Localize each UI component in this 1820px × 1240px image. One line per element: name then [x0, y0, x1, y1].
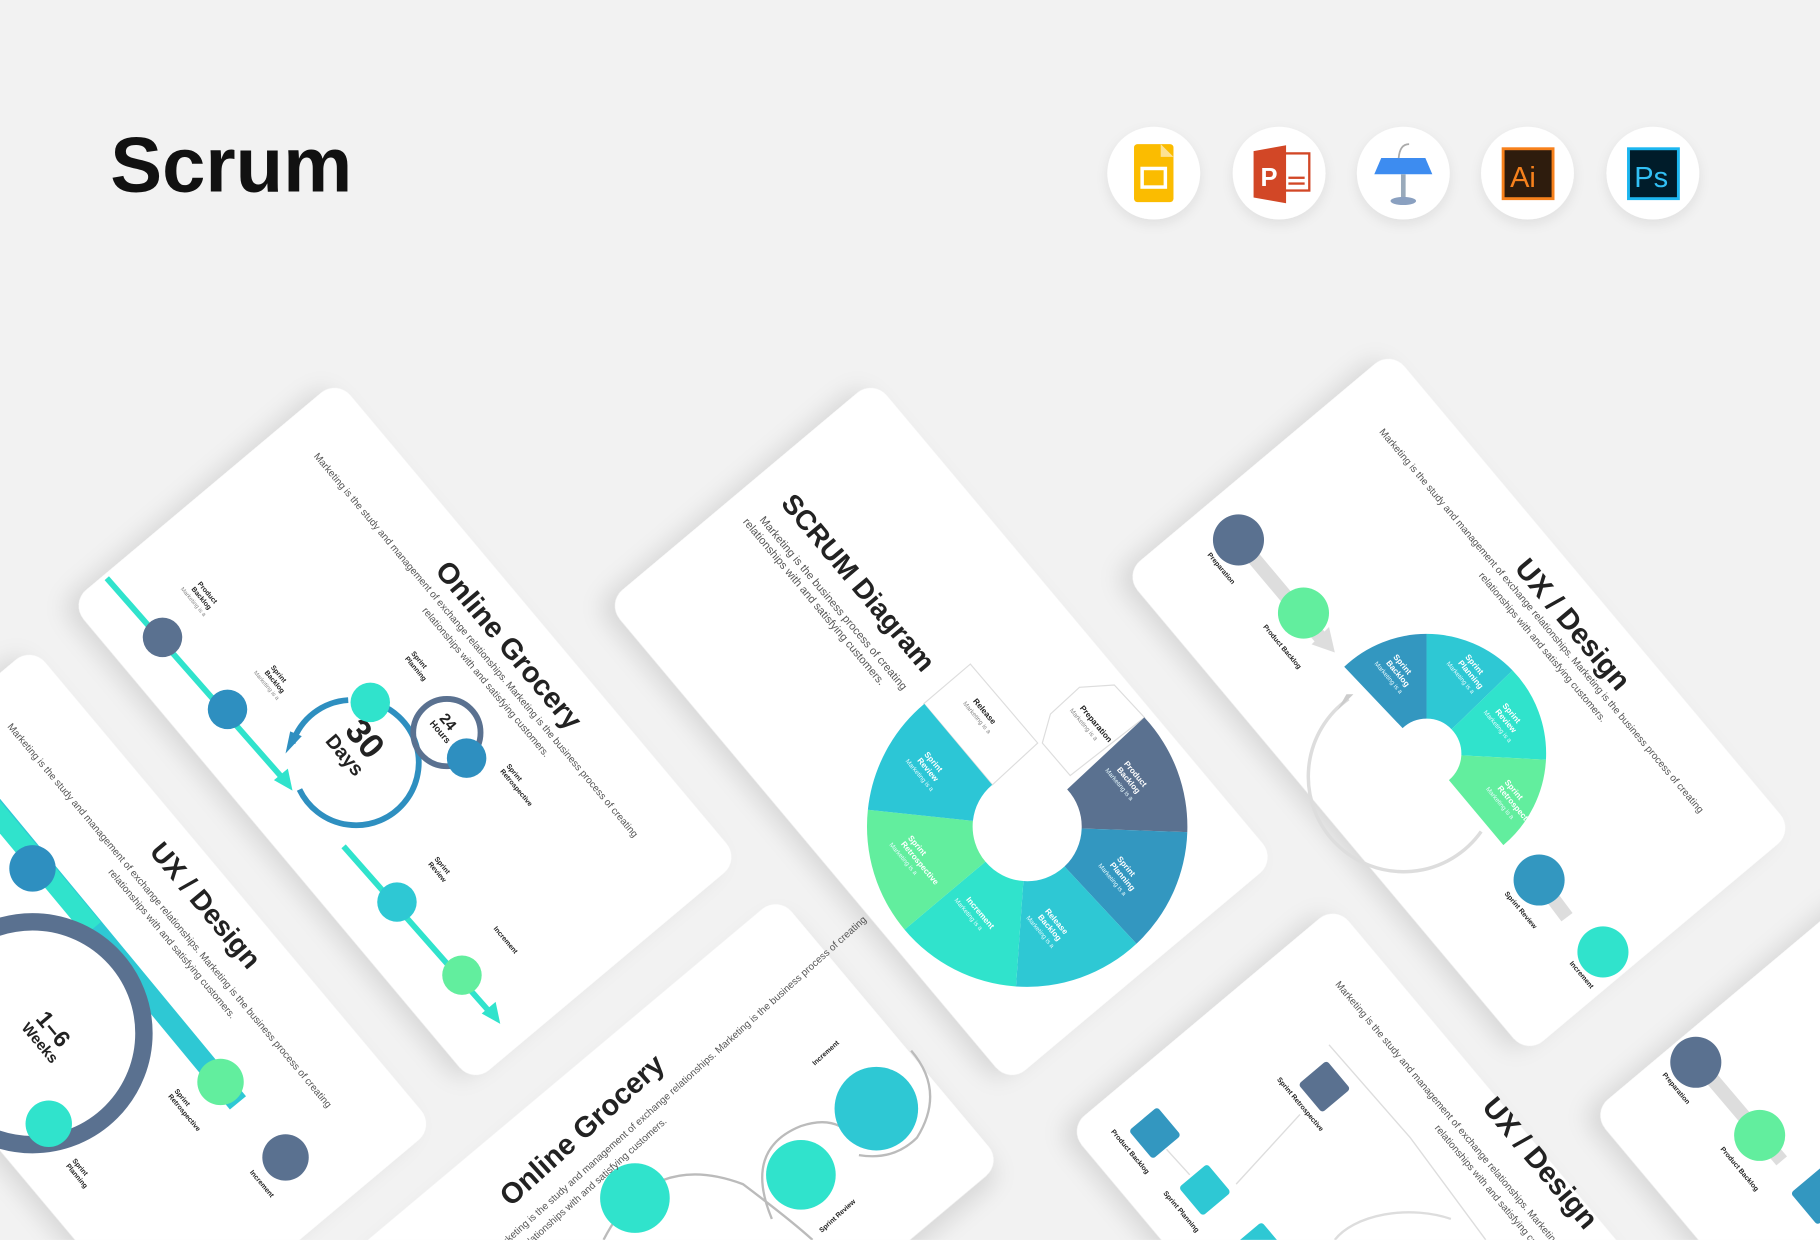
description: relationships with and satisfying customers. [1476, 571, 1608, 725]
half donut: Marketing is a [1373, 661, 1404, 696]
half donut: Sprint [1391, 653, 1413, 677]
labels: Marketing is a [179, 587, 207, 619]
title: Scrum [110, 123, 352, 209]
cycle arc [1308, 699, 1481, 872]
description: Marketing is the study and management of exchange relationships. Marketing is the business process of creating [311, 451, 640, 840]
panel: online grocery top-left: Sprint [269, 664, 288, 685]
description: Marketing is the business process of creating [757, 514, 909, 693]
description: relationships with and satisfying customers. [106, 867, 237, 1021]
icon: google slides [1107, 127, 1200, 220]
donut chart: Marketing is a [887, 842, 919, 877]
donut chart: Sprint [906, 834, 928, 858]
half donut: Marketing is a [1482, 709, 1513, 745]
icon: illustrator: Ai [1510, 162, 1536, 194]
donut chart: Marketing is a [904, 758, 935, 793]
panel: UX design left: Sprint [70, 1158, 89, 1178]
panel: UX design bottom-right: Sprint Planning [1162, 1190, 1200, 1234]
half donut: Retrospective [1496, 784, 1537, 831]
panel: UX design top-right [1124, 350, 1794, 1054]
donut chart: Planning [1108, 861, 1137, 893]
panel: UX design left: Increment [248, 1169, 275, 1200]
panel: online grocery top-left: Sprint [433, 856, 451, 876]
donut chart: Retrospective [899, 840, 941, 887]
panel: online grocery bottom [368, 904, 998, 1240]
panel: online grocery bottom: Sprint Review [818, 1198, 858, 1234]
donut chart: Sprint [922, 750, 945, 774]
labels: Retrospective [166, 1093, 201, 1133]
diamond nodes [1298, 1060, 1351, 1113]
nodes [835, 1067, 918, 1150]
panel: UX design top-right: Sprint Review [1503, 891, 1538, 931]
panel: online grocery top-left: Retrospective [498, 768, 533, 808]
title: Online Grocery [429, 555, 588, 736]
donut chart: Product [1122, 759, 1149, 789]
icon: keynote [1357, 127, 1450, 220]
title: UX / Design [144, 836, 267, 975]
description: Marketing is the study and management of exchange relationships. Marketing is the business process of creating [5, 722, 333, 1110]
panel: UX design bottom-right: Product Backlog [1109, 1129, 1150, 1175]
labels: Sprint [173, 1088, 191, 1108]
panel: online grocery top-left: Days [321, 730, 368, 781]
tab: preparation: Preparation [1078, 704, 1114, 744]
donut chart: Release [1043, 907, 1070, 936]
half donut: Planning [1456, 659, 1485, 691]
half donut: Backlog [1384, 659, 1411, 689]
panel: UX design top-right: Product Backlog [1261, 624, 1302, 671]
panel: far right card: Preparation [1661, 1072, 1691, 1106]
donut chart: Backlog [1115, 765, 1142, 795]
labels: Backlog [190, 586, 212, 611]
labels: Sprint Retrospective [1275, 1076, 1324, 1133]
donut chart: Backlog [1036, 913, 1063, 943]
half donut: Sprint [1503, 778, 1525, 802]
labels [180, 581, 218, 617]
title: SCRUM Diagram [775, 488, 941, 677]
ring: 1-6 weeks [0, 922, 144, 1145]
description: relationships with and satisfying customers. [420, 606, 551, 760]
panel: scrum diagram [607, 379, 1276, 1083]
panel: online grocery top-left: Increment [492, 926, 519, 956]
panel: online grocery top-left: Backlog [263, 670, 285, 695]
half donut: Sprint [1463, 653, 1485, 677]
panel: UX design left: Weeks [18, 1020, 61, 1067]
panel: online grocery top-left: Marketing is a [252, 670, 280, 702]
panel: online grocery top-left: Hours [428, 718, 453, 745]
donut chart: Marketing is a [1024, 915, 1056, 950]
panel: online grocery top-left: 30 [337, 712, 392, 766]
24 hours cycle [413, 699, 481, 766]
donut chart: Marketing is a [953, 897, 984, 932]
description: relationships with and satisfying customers. [740, 516, 887, 688]
half donut: Sprint [1500, 701, 1523, 725]
description: Marketing is the study and management of exchange relationships. Marketing is the business process of creating [1377, 427, 1705, 816]
icon: photoshop: Ps [1634, 162, 1668, 194]
panel: online grocery top-left [70, 379, 740, 1083]
labels: Increment [811, 1039, 841, 1067]
labels: Preparation [1206, 552, 1236, 586]
donut chart [867, 704, 1187, 987]
panel: online grocery top-left: Sprint [505, 763, 523, 783]
tab: release: Marketing is a [961, 700, 992, 736]
nodes [1213, 514, 1264, 565]
nodes [143, 618, 182, 657]
title: UX / Design [1476, 1091, 1604, 1235]
donut chart: Marketing is a [1096, 862, 1128, 898]
panel: UX design left [0, 646, 435, 1240]
panel: far right card [1592, 889, 1820, 1240]
panel: UX design left: Planning [64, 1163, 88, 1190]
panel: far right card: Product Backlog [1719, 1146, 1760, 1193]
panel: online grocery top-left: Planning [403, 656, 427, 683]
tab: release [924, 664, 1038, 785]
panel: online grocery top-left: 24 [436, 710, 460, 735]
panel: UX design bottom-right [1062, 914, 1616, 1240]
icon: powerpoint: P [1261, 164, 1278, 192]
donut chart: Increment [964, 895, 996, 931]
half donut: Marketing is a [1484, 786, 1515, 821]
title: UX / Design [1508, 553, 1636, 697]
donut chart: Sprint [1115, 855, 1137, 879]
30 days cycle [299, 702, 419, 825]
donut chart: Review [915, 756, 941, 784]
tab: preparation [1042, 685, 1144, 776]
panel: online grocery top-left: Sprint [409, 650, 428, 671]
panel: online grocery top-left: Review [426, 861, 447, 884]
icon: photoshop [1606, 127, 1699, 220]
panel: UX design left: 1–6 [31, 1006, 76, 1052]
icon row [1107, 127, 1699, 220]
half donut [1344, 634, 1546, 845]
tab: release: Release [971, 697, 998, 726]
title: Online Grocery [494, 1049, 671, 1213]
icon: powerpoint [1233, 127, 1326, 220]
tab: preparation: Marketing is a [1068, 707, 1099, 743]
donut chart: Marketing is a [1103, 767, 1134, 803]
nodes [9, 845, 56, 892]
panel: UX design top-right: Increment [1568, 960, 1595, 991]
half donut: Marketing is a [1445, 661, 1476, 696]
icon: illustrator [1481, 127, 1574, 220]
half donut: Review [1493, 707, 1519, 735]
labels: Product [196, 581, 218, 606]
